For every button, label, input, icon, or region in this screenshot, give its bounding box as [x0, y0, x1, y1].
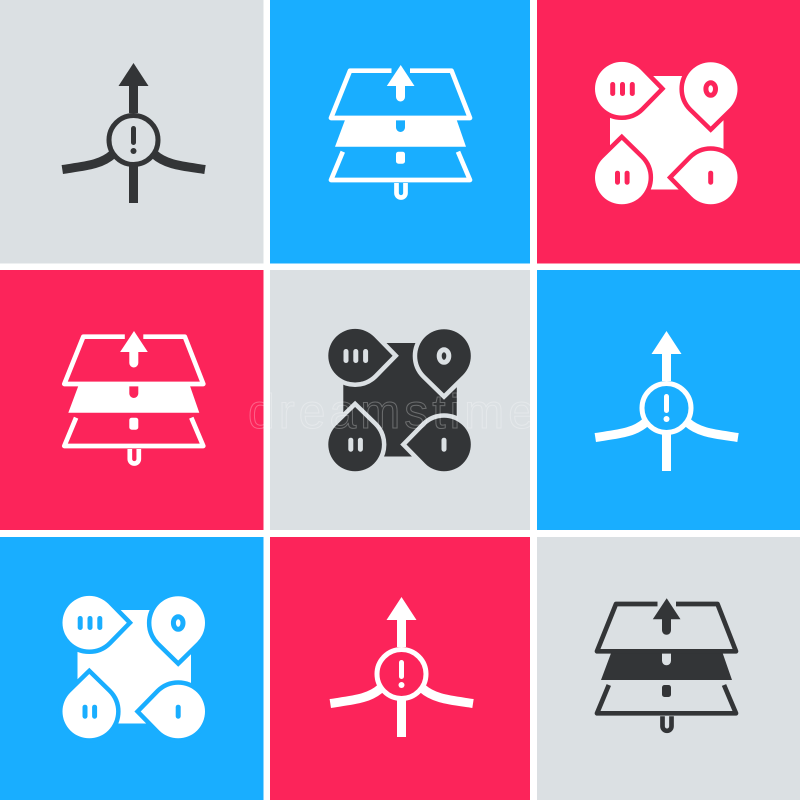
- panel: bottom right, grey layers icon: [537, 537, 800, 800]
- icon: square with four map pins: [595, 62, 738, 204]
- icon: junction arrow with warning: [62, 63, 205, 203]
- panel: centre, grey pins icon: [270, 270, 530, 530]
- icon: stacked layers with arrow: [331, 65, 470, 198]
- panel: top centre, blue layers icon: [270, 0, 530, 264]
- panel: middle right, blue route icon: [537, 270, 800, 530]
- panel: top right, red pins icon: [537, 0, 800, 264]
- panel: middle left, red layers icon: [0, 270, 264, 530]
- icon: stacked layers with arrow: [64, 331, 203, 464]
- watermark: dreamstime: [248, 386, 535, 439]
- icon: junction arrow with warning: [595, 331, 738, 471]
- panel: bottom centre, red route icon: [270, 537, 530, 800]
- icon: stacked layers with arrow: [597, 598, 736, 731]
- icon: junction arrow with warning: [330, 597, 473, 737]
- icon: square with four map pins: [62, 596, 205, 738]
- panel: top left, grey route icon: [0, 0, 264, 264]
- panel: bottom left, blue pins icon: [0, 537, 264, 800]
- icon: square with four map pins: [328, 329, 471, 471]
